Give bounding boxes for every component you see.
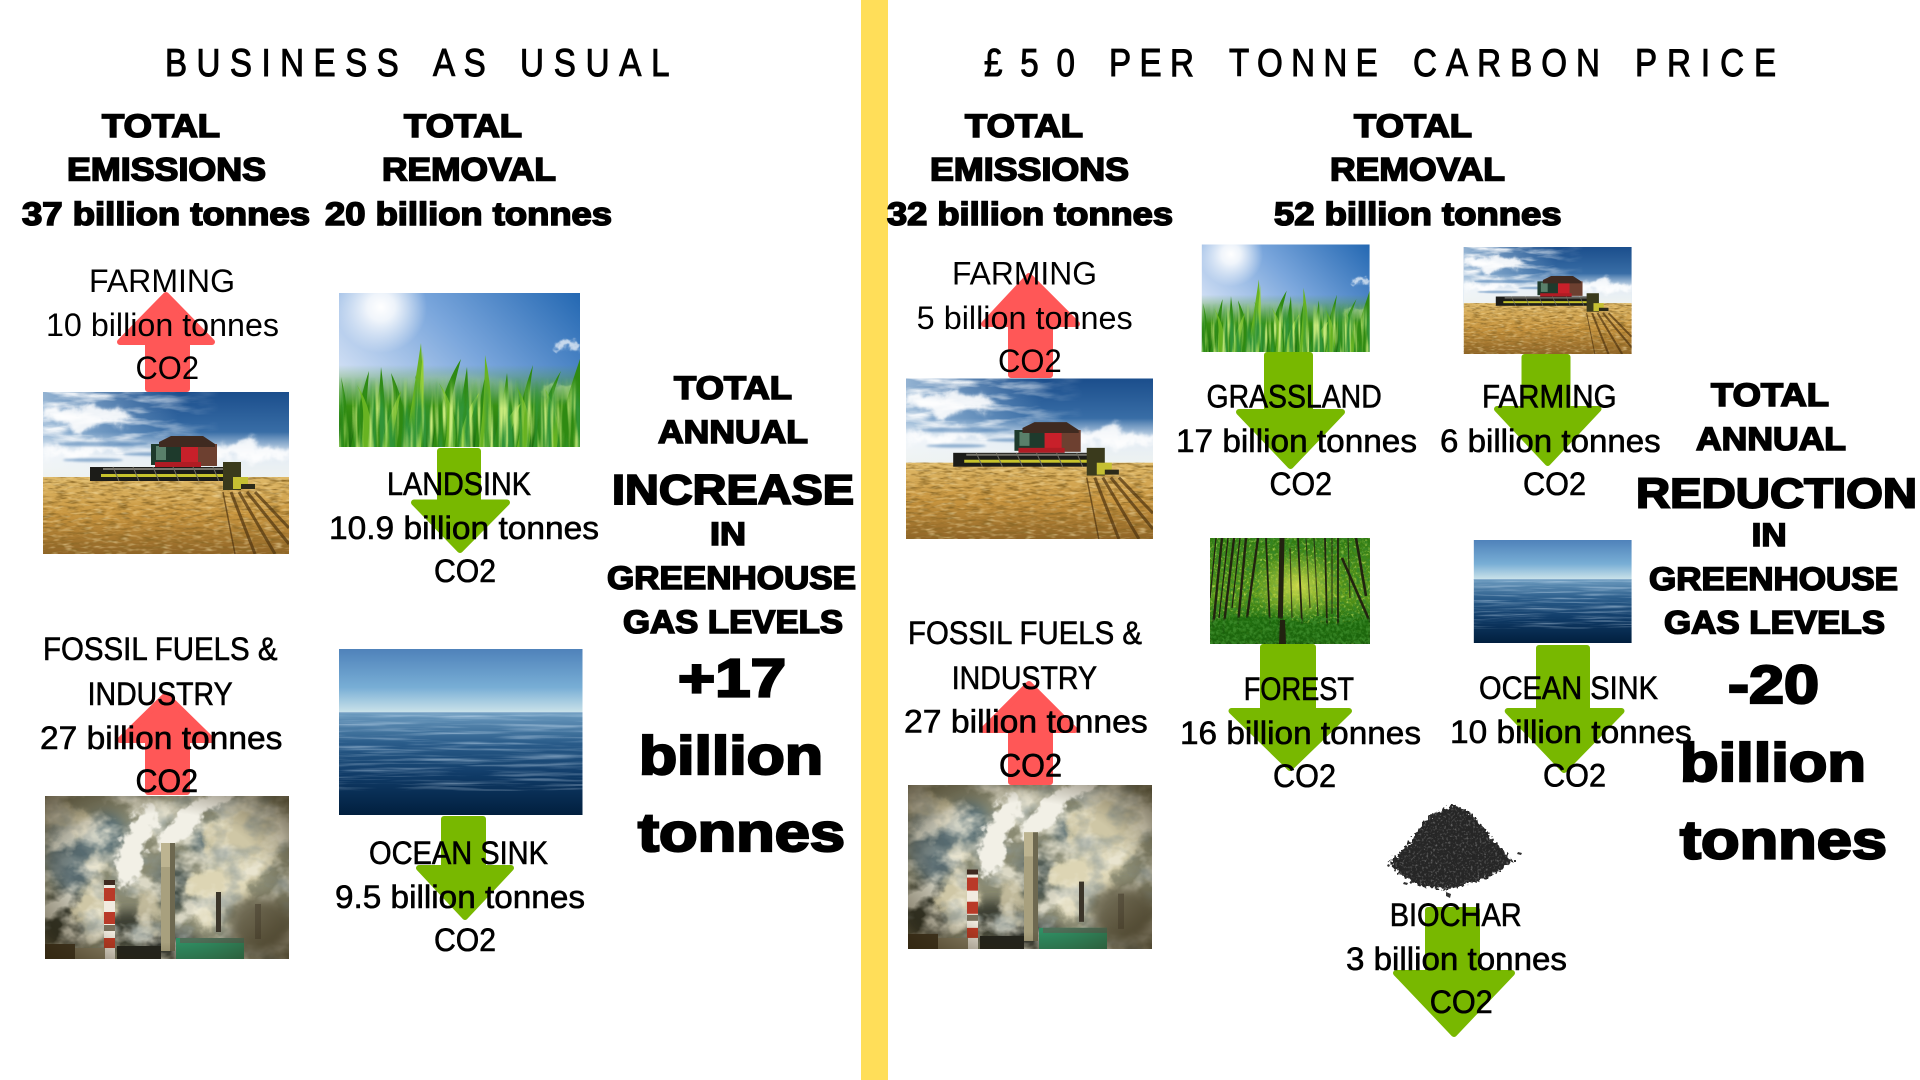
item: fossil fuels and industry emissions xyxy=(900,615,1155,950)
label: fossil fuels and industry 27 billion tonnes: FOSSIL FUELS & xyxy=(43,631,278,667)
heading: total removal xyxy=(1274,108,1562,232)
summary: total annual increase: +17 xyxy=(678,648,786,708)
label: grassland 17 billion tonnes: CO2 xyxy=(1270,466,1332,502)
item: farming emissions xyxy=(901,256,1162,539)
label: farming 10 billion tonnes: FARMING xyxy=(89,263,235,299)
arrow: removal down xyxy=(414,451,507,550)
label: farming 5 billion tonnes xyxy=(917,256,1133,379)
summary: total annual increase: IN xyxy=(710,516,746,552)
item: farming removal xyxy=(1440,247,1661,502)
summary: total annual increase: INCREASE xyxy=(612,466,854,513)
title: business as usual: AS xyxy=(433,40,486,85)
item: ocean sink removal xyxy=(1450,540,1692,794)
label: farming 10 billion tonnes xyxy=(46,263,279,386)
title: £50 per tonne carbon price: TONNE xyxy=(1229,40,1378,85)
photo: smoking factory chimneys xyxy=(900,776,1155,950)
summary: total annual reduction: IN xyxy=(1752,517,1787,553)
label: landsink 10.9 billion tonnes: 10.9 billion tonnes xyxy=(329,510,599,546)
title: £50 per tonne carbon price: CARBON xyxy=(1413,40,1600,85)
arrow: removal down xyxy=(419,819,511,917)
label: biochar 3 billion tonnes: CO2 xyxy=(1430,984,1493,1020)
label: ocean sink 9.5 billion tonnes xyxy=(335,835,585,958)
photo: ocean horizon xyxy=(339,649,582,815)
label: farming 6 billion tonnes: FARMING xyxy=(1482,379,1617,415)
title: business as usual: USUAL xyxy=(520,40,670,85)
label: fossil fuels and industry 27 billion tonnes: CO2 xyxy=(999,748,1062,784)
label: farming 5 billion tonnes: 5 billion tonnes xyxy=(917,300,1133,336)
photo: combine harvester in wheat field xyxy=(38,392,298,554)
summary: total annual reduction: ANNUAL xyxy=(1696,421,1846,457)
title: £50 per tonne carbon price xyxy=(984,40,1776,85)
photo: combine harvester in wheat field xyxy=(1460,247,1638,354)
label: farming 5 billion tonnes: CO2 xyxy=(998,343,1062,379)
summary: total annual reduction: GREENHOUSE xyxy=(1649,561,1898,597)
label: fossil fuels and industry 27 billion tonnes: 27 billion tonnes xyxy=(40,720,282,756)
divider bar xyxy=(861,0,888,1080)
summary: total annual reduction: tonnes xyxy=(1680,810,1887,870)
label: farming 6 billion tonnes: 6 billion tonnes xyxy=(1440,423,1661,459)
heading: total removal: TOTAL xyxy=(404,108,522,144)
summary: total annual reduction: -20 xyxy=(1728,655,1819,715)
label: forest 16 billion tonnes xyxy=(1180,671,1421,794)
label: ocean sink 9.5 billion tonnes: OCEAN SINK xyxy=(369,835,548,871)
label: grassland 17 billion tonnes: GRASSLAND xyxy=(1206,379,1382,415)
arrow: removal down xyxy=(1396,910,1512,1034)
label: forest 16 billion tonnes: 16 billion tonnes xyxy=(1180,715,1421,751)
summary: total annual increase: tonnes xyxy=(638,803,845,863)
title: business as usual: BUSINESS xyxy=(165,40,399,85)
title: £50 per tonne carbon price: PRICE xyxy=(1635,40,1776,85)
photo: grass and sky xyxy=(1199,222,1370,352)
summary: total annual reduction: TOTAL xyxy=(1711,377,1829,413)
panel: carbon price scenario xyxy=(887,40,1917,1034)
arrow: emissions up xyxy=(120,695,212,792)
summary: total annual increase: billion xyxy=(639,726,823,786)
panel: business as usual xyxy=(22,40,856,960)
summary: total annual reduction: billion xyxy=(1680,733,1866,793)
heading: total removal: REMOVAL xyxy=(1330,152,1505,188)
label: biochar 3 billion tonnes: BIOCHAR xyxy=(1390,897,1522,933)
heading: total emissions: EMISSIONS xyxy=(930,152,1129,188)
arrow: emissions up xyxy=(983,684,1075,782)
label: ocean sink 10 billion tonnes: CO2 xyxy=(1543,758,1606,794)
label: biochar 3 billion tonnes: 3 billion tonnes xyxy=(1346,941,1567,977)
heading: total emissions xyxy=(22,108,310,232)
heading: total removal: 20 billion tonnes xyxy=(325,196,612,232)
icon: biochar pile xyxy=(1387,806,1522,898)
label: ocean sink 10 billion tonnes xyxy=(1450,670,1692,794)
item: grassland removal xyxy=(1176,222,1417,502)
arrow: removal down xyxy=(1232,647,1349,768)
label: grassland 17 billion tonnes xyxy=(1176,379,1417,502)
summary: total annual reduction: REDUCTION xyxy=(1636,470,1917,517)
heading: total removal: 52 billion tonnes xyxy=(1274,196,1562,232)
title: £50 per tonne carbon price: £50 xyxy=(984,40,1075,85)
arrow: removal down xyxy=(1508,648,1622,770)
summary: total annual reduction xyxy=(1636,377,1917,870)
title: £50 per tonne carbon price: PER xyxy=(1109,40,1194,85)
photo: forest trees xyxy=(1210,538,1370,644)
photo: grass and sky xyxy=(335,261,580,447)
label: fossil fuels and industry 27 billion tonnes xyxy=(904,615,1148,784)
heading: total emissions: 37 billion tonnes xyxy=(22,196,310,232)
photo: smoking factory chimneys xyxy=(37,787,292,960)
label: ocean sink 9.5 billion tonnes: 9.5 billion tonnes xyxy=(335,879,585,915)
arrow: emissions up xyxy=(984,276,1077,375)
heading: total emissions: TOTAL xyxy=(965,108,1083,144)
item: ocean sink removal xyxy=(335,649,585,958)
title: business as usual xyxy=(165,40,670,85)
label: fossil fuels and industry 27 billion tonnes: 27 billion tonnes xyxy=(904,704,1148,740)
label: farming 6 billion tonnes xyxy=(1440,379,1661,502)
arrow: removal down xyxy=(1239,355,1342,466)
summary: total annual increase: TOTAL xyxy=(674,370,792,406)
label: landsink 10.9 billion tonnes: CO2 xyxy=(434,553,496,589)
summary: total annual increase: GAS LEVELS xyxy=(623,604,843,640)
label: biochar 3 billion tonnes xyxy=(1346,897,1567,1020)
summary: total annual reduction: GAS LEVELS xyxy=(1664,604,1885,640)
label: landsink 10.9 billion tonnes xyxy=(329,466,599,589)
heading: total removal: TOTAL xyxy=(1354,108,1472,144)
label: ocean sink 10 billion tonnes: OCEAN SINK xyxy=(1479,670,1658,706)
label: fossil fuels and industry 27 billion tonnes: INDUSTRY xyxy=(88,676,233,712)
summary: total annual increase: ANNUAL xyxy=(658,414,808,450)
heading: total emissions: 32 billion tonnes xyxy=(887,196,1173,232)
label: farming 5 billion tonnes: FARMING xyxy=(952,256,1097,292)
photo: ocean horizon xyxy=(1474,540,1632,643)
label: forest 16 billion tonnes: CO2 xyxy=(1273,758,1336,794)
heading: total emissions: EMISSIONS xyxy=(67,152,266,188)
item: forest removal xyxy=(1180,538,1421,794)
label: landsink 10.9 billion tonnes: LANDSINK xyxy=(387,466,531,502)
item: biochar removal xyxy=(1346,806,1567,1034)
label: forest 16 billion tonnes: FOREST xyxy=(1244,671,1354,707)
label: fossil fuels and industry 27 billion tonnes xyxy=(40,631,282,799)
label: ocean sink 10 billion tonnes: 10 billion tonnes xyxy=(1450,714,1692,750)
summary: total annual increase xyxy=(607,370,856,863)
label: farming 10 billion tonnes: CO2 xyxy=(136,350,199,386)
summary: total annual increase: GREENHOUSE xyxy=(607,560,856,596)
item: fossil fuels and industry emissions xyxy=(37,631,292,960)
label: fossil fuels and industry 27 billion tonnes: FOSSIL FUELS & xyxy=(908,615,1142,651)
item: farming emissions xyxy=(38,263,298,554)
heading: total emissions: TOTAL xyxy=(102,108,220,144)
heading: total removal: REMOVAL xyxy=(382,152,556,188)
label: fossil fuels and industry 27 billion tonnes: CO2 xyxy=(136,763,198,799)
photo: combine harvester in wheat field xyxy=(901,378,1162,539)
item: land sink removal xyxy=(329,261,599,589)
arrow: emissions up xyxy=(120,295,212,389)
label: grassland 17 billion tonnes: 17 billion tonnes xyxy=(1176,423,1417,459)
label: ocean sink 9.5 billion tonnes: CO2 xyxy=(434,922,496,958)
label: fossil fuels and industry 27 billion tonnes: INDUSTRY xyxy=(952,660,1097,696)
heading: total emissions xyxy=(887,108,1173,232)
arrow: removal down xyxy=(1497,357,1598,463)
heading: total removal xyxy=(325,108,612,232)
label: farming 10 billion tonnes: 10 billion tonnes xyxy=(46,307,279,343)
label: farming 6 billion tonnes: CO2 xyxy=(1523,466,1586,502)
